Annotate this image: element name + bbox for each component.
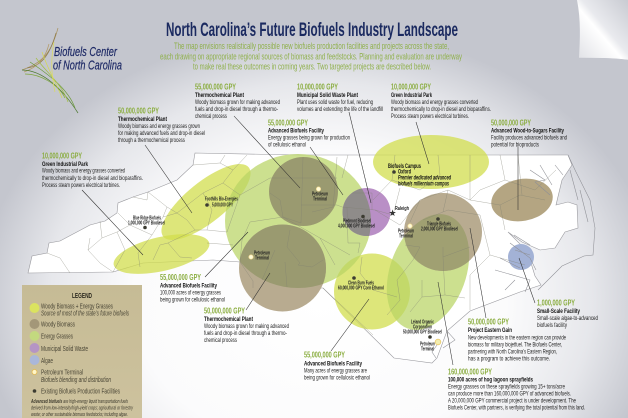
callout: 1,000,000 GPY Small-Scale Facility: 1,000,000 GPY: [537, 298, 575, 308]
logo swoosh: [22, 28, 78, 113]
callout: 50,000,000 GPY Thermochemical Plant south: [204, 306, 289, 344]
callout: 50,000,000 GPY Project Eastern Gain: [468, 318, 566, 362]
callout: 55,000,000 GPY Thermochemical Plant: chemical process: [195, 113, 227, 120]
map label: Petroleum Terminal coast: Terminal: [421, 346, 434, 352]
map label: Piedmont Biodiesel: Piedmont Biodiesel: [343, 218, 371, 224]
callout: 55,000,000 GPY Advanced Biofuels Facility west: [160, 273, 225, 304]
page curl: [577, 0, 628, 60]
callout: 50,000,000 GPY Thermochemical Plant south: Thermochemical Plant: [204, 316, 254, 323]
logo wordmark: Biofuels Center: [54, 44, 117, 59]
map label: Piedmont Biodiesel: [338, 215, 375, 230]
callout: 55,000,000 GPY Thermochemical Plant: [195, 82, 280, 120]
legend item: petroleum terminal: Biofuels blending and distribution: [41, 375, 111, 384]
callout: 10,000,000 GPY Green Industrial Park east: 10,000,000 GPY: [391, 82, 431, 92]
map of North Carolina: [28, 135, 595, 363]
map label: Raleigh: Raleigh: [395, 206, 409, 212]
callout: 1,000,000 GPY Small-Scale Facility: Small-scale algae-to-advanced: [537, 315, 598, 322]
callout: 55,000,000 GPY Thermochemical Plant: Woody biomass grown for making advanced: [195, 99, 280, 106]
callout: 50,000,000 GPY Thermochemical Plant south: fuels and drop-in diesel through a thermo-: [204, 330, 287, 337]
callout: 55,000,000 GPY Advanced Biofuels Facility north: 55,000,000 GPY: [268, 118, 308, 128]
map label: Petroleum Terminal west: Petroleum: [254, 250, 270, 256]
callout: 50,000,000 GPY Thermochemical Plant north: through a thermochemical process: [118, 137, 185, 144]
callout: 160,000,000 GPY hog lagoon sprayfields: A 20,000,000 GPY commercial project is under development. The: [448, 398, 576, 404]
callout: 50,000,000 GPY Thermochemical Plant south: chemical process: [204, 337, 237, 344]
legend item: petroleum terminal: [32, 368, 111, 384]
map label: Foothills Bio-Energies: 5,000,000 GPY: [212, 202, 233, 208]
legend item: woody biomass: Woody Biomass: [41, 320, 75, 328]
map label: Petroleum Terminal coast: Petroleum: [420, 342, 435, 348]
map label: Biofuels Campus Oxford: Premier dedicated advanced: [398, 174, 452, 182]
callout: 10,000,000 GPY Green Industrial Park west: [42, 152, 143, 189]
callout: 10,000,000 GPY Municipal Solid Waste Plant: [297, 82, 383, 113]
callout: 55,000,000 GPY Advanced Biofuels Facility south: being grown for cellulosic ethanol: [304, 374, 370, 382]
callout: 10,000,000 GPY Green Industrial Park east: Green Industrial Park: [391, 92, 432, 99]
map label: Triangle Biofuels: 2,000,000 GPY Biodiesel: [421, 226, 458, 232]
county lines: [47, 155, 556, 335]
map label: Blue Ridge Biofuels: 1,000,000 GPY Biodiesel: [128, 220, 165, 226]
callout: 50,000,000 GPY Project Eastern Gain: Project Eastern Gain: [468, 327, 512, 334]
map label: Petroleum Terminal central: [312, 187, 328, 202]
map label: Foothills Bio-Energies: Foothills Bio-Energies: [205, 196, 238, 202]
callout: 50,000,000 GPY Project Eastern Gain: has a program to achieve this outcome.: [468, 356, 550, 362]
map label: Biofuels Campus Oxford: Oxford: [398, 168, 411, 176]
map label: Petroleum Terminal Triangle: Terminal: [399, 234, 413, 240]
map label: Biofuels Campus Oxford: biofuels millennium campus: [398, 180, 449, 188]
callout: 55,000,000 GPY Advanced Biofuels Facility north: of cellulosic ethanol: [268, 142, 306, 148]
map label: Petroleum Terminal central: Terminal: [313, 196, 327, 202]
callout: 55,000,000 GPY Advanced Biofuels Facility south: 55,000,000 GPY: [304, 350, 345, 360]
callout: 10,000,000 GPY Green Industrial Park east: Woody biomass and energy grasses converted: [391, 99, 478, 106]
callout: 50,000,000 GPY Thermochemical Plant north: Thermochemical Plant: [118, 116, 168, 123]
callout: 10,000,000 GPY Green Industrial Park west: Green Industrial Park: [42, 161, 88, 168]
callout: 55,000,000 GPY Advanced Biofuels Facility west: Advanced Biofuels Facility: [160, 282, 217, 290]
callout: 160,000,000 GPY hog lagoon sprayfields: [448, 368, 585, 412]
intro text: to make real these outcomes in coming years. Two targeted projects are described below.: [193, 62, 431, 72]
callout: 10,000,000 GPY Green Industrial Park east: thermochemically to drop-in diesel and bioparaffins.: [391, 106, 491, 113]
callout: 55,000,000 GPY Advanced Biofuels Facility south: Advanced Biofuels Facility: [304, 360, 362, 368]
callout: 10,000,000 GPY Green Industrial Park west: Woody biomass and energy grasses converted: [42, 168, 125, 174]
callout: 55,000,000 GPY Advanced Biofuels Facility south: Many acres of energy grasses are: [304, 368, 367, 374]
legend footnote: waste; or other sustainable biomass feedstocks; including algae.: [31, 412, 128, 418]
callout: 50,000,000 GPY Thermochemical Plant north: Woody biomass and energy grasses grown: [118, 123, 200, 130]
municipal solid waste region: [342, 188, 390, 236]
callout: 10,000,000 GPY Green Industrial Park west: 10,000,000 GPY: [42, 152, 82, 160]
callout: 50,000,000 GPY Advanced Wood-to-Sugars Facility: [491, 118, 567, 148]
algae region: [508, 244, 534, 270]
legend item: woody biomass + energy grasses: Woody Biomass + Energy Grasses: [41, 302, 113, 310]
callout: 50,000,000 GPY Thermochemical Plant north: for making advanced fuels and drop-in diesel: [118, 130, 205, 137]
panel: legend: [22, 285, 142, 418]
callout: 10,000,000 GPY Green Industrial Park west: thermochemically to drop-in diesel and bioparaffins.: [42, 175, 143, 182]
callout: 160,000,000 GPY hog lagoon sprayfields: 100,000 acres of hog lagoon sprayfields: [448, 376, 533, 384]
callout: 10,000,000 GPY Green Industrial Park east: [391, 82, 491, 120]
map label: Piedmont Biodiesel: 4,000,000 GPY Biodiesel: [338, 224, 375, 230]
map label: Clean Burn Fuels: Clean Burn Fuels: [348, 280, 374, 286]
map label: Petroleum Terminal coast: [420, 339, 441, 352]
coastal and sound outlines: [432, 155, 595, 358]
callout: 50,000,000 GPY Project Eastern Gain: biomass for military biojetfuel. The Biofuels Center,: [468, 342, 562, 348]
map label: Leland Organic Corporation: Leland Organic: [411, 320, 434, 326]
callout: 50,000,000 GPY Thermochemical Plant south: Woody biomass grown for making advanced: [204, 323, 289, 330]
callout: 55,000,000 GPY Advanced Biofuels Facility west: 55,000,000 GPY: [160, 273, 201, 282]
map label: Blue Ridge Biofuels: Blue Ridge Biofuels: [133, 216, 161, 222]
callout: 1,000,000 GPY Small-Scale Facility: biofuels facility: [537, 322, 568, 329]
map label: Leland Organic Corporation: Corporation: [413, 324, 432, 330]
callout: 55,000,000 GPY Advanced Biofuels Facility north: Advanced Biofuels Facility: [268, 128, 324, 134]
callout: 55,000,000 GPY Advanced Biofuels Facility north: [268, 118, 350, 148]
map label: Raleigh: [388, 206, 409, 218]
legend item: petroleum terminal: Petroleum Terminal: [41, 368, 83, 376]
legend footnote: derived from low-intensity/high-yield crops; agricultural or forestry: [31, 406, 133, 412]
map label: Petroleum Terminal Triangle: Petroleum: [398, 228, 414, 234]
callout: 50,000,000 GPY Project Eastern Gain: 50,000,000 GPY: [468, 318, 509, 326]
callout: 50,000,000 GPY Project Eastern Gain: partnering with North Carolina’s Eastern Region,: [468, 348, 557, 356]
legend item: existing production facilities: Existing Biofuels Production Facilities: [41, 386, 120, 396]
map label: Raleigh: ★: [388, 208, 397, 218]
map label: Triangle Biofuels: [421, 217, 458, 232]
legend footnote: Advanced biofuels are high-energy liquid transportation fuels: [30, 399, 128, 405]
callout: 50,000,000 GPY Thermochemical Plant north: [118, 106, 205, 144]
map label: Biofuels Campus Oxford: Biofuels Campus: [388, 163, 421, 170]
map label: Blue Ridge Biofuels: [128, 216, 165, 229]
callout: 50,000,000 GPY Thermochemical Plant north: 50,000,000 GPY: [118, 106, 159, 116]
legend item: energy grasses: Energy Grasses: [41, 332, 73, 340]
woody biomass + energy grasses regions: [110, 135, 489, 330]
legend heading: LEGEND: [72, 293, 92, 300]
callout: 10,000,000 GPY Municipal Solid Waste Plant: Plant uses solid waste for fuel, reducing: [297, 99, 373, 106]
legend item: municipal solid waste: Municipal Solid Waste: [41, 344, 88, 353]
legend item: woody biomass + energy grasses: Source of most of the state’s future biofuels: [41, 308, 129, 318]
intro text: [160, 41, 462, 72]
callout: 10,000,000 GPY Green Industrial Park west: Process steam powers electrical turbines.: [42, 182, 120, 189]
map label: Petroleum Terminal west: Terminal: [255, 256, 269, 262]
map label: Petroleum Terminal central: Petroleum: [312, 192, 328, 198]
callout: 50,000,000 GPY Advanced Wood-to-Sugars Facility: 50,000,000 GPY: [491, 118, 531, 128]
callout: 55,000,000 GPY Advanced Biofuels Facility north: Energy grasses being grown for production: [268, 134, 350, 142]
callout: 10,000,000 GPY Municipal Solid Waste Plant: Municipal Solid Waste Plant: [297, 92, 359, 99]
callout: 50,000,000 GPY Advanced Wood-to-Sugars Facility: Advanced Wood-to-Sugars Facility: [491, 128, 564, 134]
map label: Biofuels Campus Oxford: [388, 163, 452, 188]
map label: Clean Burn Fuels: [338, 276, 384, 292]
callout: 160,000,000 GPY hog lagoon sprayfields: can produce more than 160,000,000 GPY of advanced biofuels.: [448, 390, 571, 398]
callout: 50,000,000 GPY Advanced Wood-to-Sugars Facility: Facility produces advanced biofuels and: [491, 134, 567, 142]
intro text: each drawing on appropriate regional sources of biomass and feedstocks. Planning and evaluation are underway: [160, 52, 462, 62]
logo wordmark: [53, 44, 122, 72]
woody biomass regions: [239, 157, 556, 312]
callout: 55,000,000 GPY Advanced Biofuels Facility south: [304, 350, 370, 382]
callout: 160,000,000 GPY hog lagoon sprayfields: 160,000,000 GPY: [448, 368, 492, 376]
map label: Petroleum Terminal Triangle: [398, 224, 414, 240]
callout: 50,000,000 GPY Advanced Wood-to-Sugars Facility: potential for bioproducts: [491, 142, 539, 148]
legend item: woody biomass + energy grasses: [30, 302, 129, 318]
map label: Petroleum Terminal west: [249, 250, 270, 262]
map label: Foothills Bio-Energies: [205, 196, 238, 208]
callout: 55,000,000 GPY Thermochemical Plant: 55,000,000 GPY: [195, 82, 236, 92]
callout: 50,000,000 GPY Project Eastern Gain: New developments in the eastern region can provide: [468, 334, 566, 342]
callout: 10,000,000 GPY Green Industrial Park east: Process steam powers electrical turbines.: [391, 113, 469, 120]
callout: 55,000,000 GPY Thermochemical Plant: fuels and drop-in diesel through a thermo-: [195, 106, 278, 113]
callout: 50,000,000 GPY Thermochemical Plant south: 50,000,000 GPY: [204, 306, 245, 316]
callout: 160,000,000 GPY hog lagoon sprayfields: Energy grasses on these sprayfields growing 15+ tons/acre: [448, 384, 565, 390]
callout: 10,000,000 GPY Municipal Solid Waste Plant: 10,000,000 GPY: [297, 82, 338, 92]
logo wordmark: of North Carolina: [53, 58, 122, 72]
callout: 55,000,000 GPY Thermochemical Plant: Thermochemical Plant: [195, 92, 245, 99]
leader lines: [82, 112, 535, 365]
energy grasses regions: [225, 154, 484, 341]
intro text: The map envisions realistically possible new biofuels production facilities and projects across the state,: [174, 41, 449, 51]
map label: Clean Burn Fuels: 60,000,000 GPY Corn Ethanol: [338, 286, 384, 292]
callout: 1,000,000 GPY Small-Scale Facility: [537, 298, 598, 329]
callout: 55,000,000 GPY Advanced Biofuels Facility west: being grown for cellulosic ethanol: [160, 296, 225, 304]
state outline: [28, 153, 578, 363]
legend item: algae: Algae: [41, 356, 53, 365]
callout: 10,000,000 GPY Municipal Solid Waste Plant: volumes and extending the life of the landfill: [297, 106, 383, 113]
map label: Triangle Biofuels: Triangle Biofuels: [427, 222, 451, 228]
logo: Biofuels Center of North Carolina: [22, 28, 122, 113]
map label: Leland Organic Corporation: [403, 320, 442, 339]
callout: 55,000,000 GPY Advanced Biofuels Facility west: 100,000 acres of energy grasses: [160, 290, 221, 296]
callout: 1,000,000 GPY Small-Scale Facility: Small-Scale Facility: [537, 308, 580, 315]
legend footnote: [30, 399, 133, 418]
map label: Leland Organic Corporation: 50,000,000 GPY Biodiesel: [403, 330, 442, 336]
